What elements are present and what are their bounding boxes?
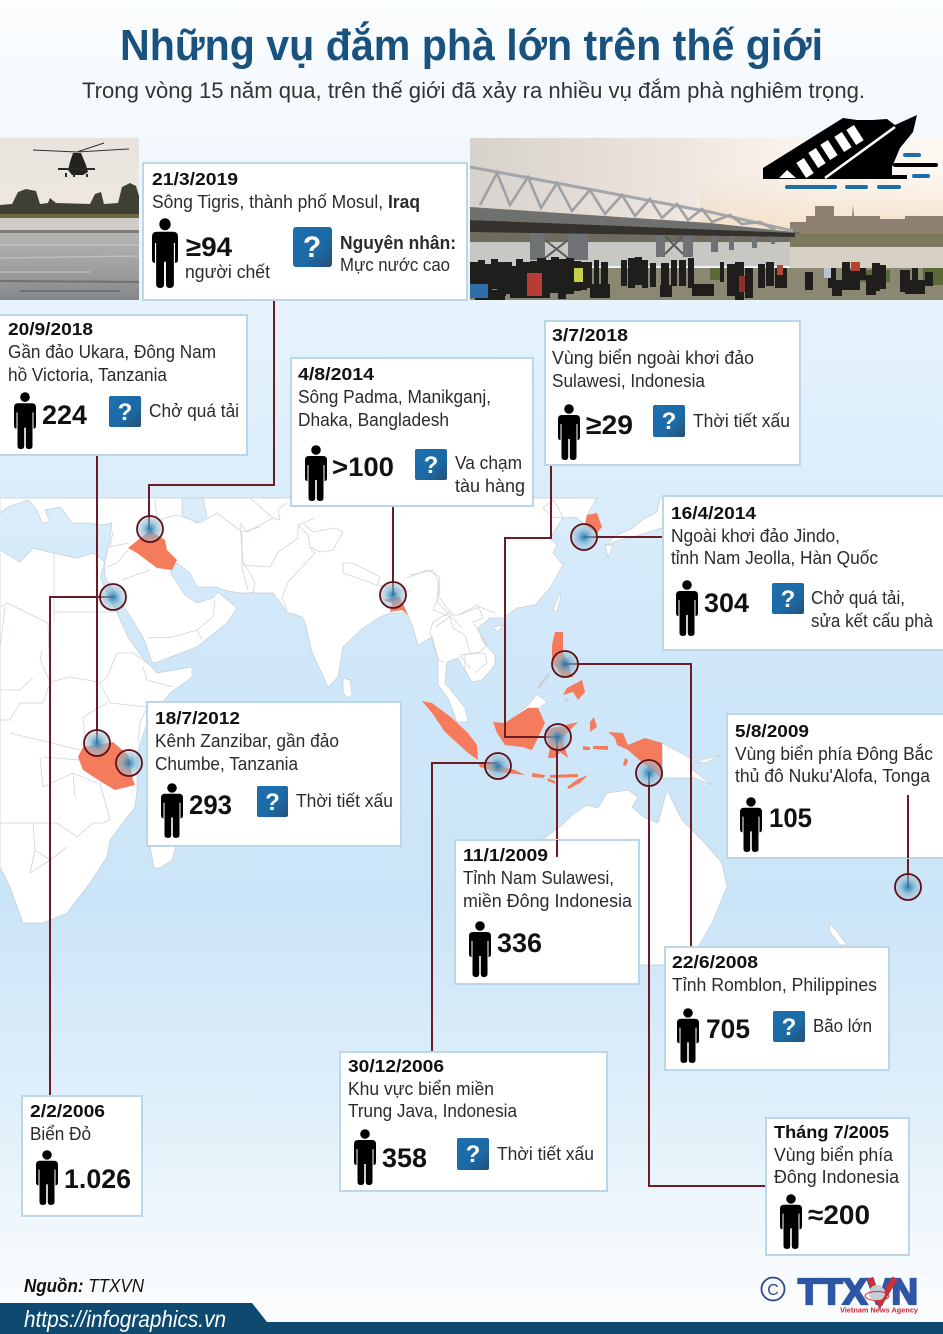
panel: 21/3/2019 Iraq: Mực nước cao	[340, 255, 450, 275]
panel: 20/9/2018 Tanzania: 20/9/2018	[8, 319, 93, 339]
photo: bridge at Mosul with crowd	[470, 138, 943, 300]
panel: 2/2/2006 Red Sea	[22, 1096, 142, 1216]
world map	[0, 498, 847, 965]
panel: 30/12/2006 Java: 358	[382, 1143, 427, 1173]
panel: 3/7/2018 Indonesia: Vùng biển ngoài khơi đảo	[552, 348, 754, 368]
panel: 18/7/2012 Zanzibar: Kênh Zanzibar, gần đảo	[155, 731, 339, 751]
icon: sinking ferry	[763, 115, 938, 189]
panel: 3/7/2018 Indonesia: Sulawesi, Indonesia	[552, 371, 706, 391]
panel: July 2005 Eastern Indonesia: Vùng biển phía	[774, 1145, 894, 1165]
panel: 18/7/2012 Zanzibar: 18/7/2012	[155, 708, 240, 728]
panel: 3/7/2018 Indonesia: ?	[662, 408, 676, 435]
panel: 20/9/2018 Tanzania: Gần đảo Ukara, Đông Nam	[8, 342, 216, 362]
panel: 11/1/2009 Sulawesi: Tỉnh Nam Sulawesi,	[463, 868, 614, 888]
panel: 11/1/2009 Sulawesi	[455, 840, 639, 984]
highlighted countries	[78, 513, 662, 790]
panel: 11/1/2009 Sulawesi: 11/1/2009	[463, 845, 548, 865]
panel: 18/7/2012 Zanzibar: ?	[265, 789, 280, 816]
panel: 4/8/2014 Bangladesh: tàu hàng	[455, 476, 525, 496]
panel: July 2005 Eastern Indonesia	[766, 1118, 909, 1255]
panel: 16/4/2014 South Korea	[663, 496, 943, 650]
panel: 2/2/2006 Red Sea: 2/2/2006	[30, 1101, 105, 1121]
panel: 22/6/2008 Philippines: Bão lớn	[813, 1016, 872, 1036]
panel: 20/9/2018 Tanzania: Chở quá tải	[149, 401, 239, 421]
panel: 18/7/2012 Zanzibar: 293	[189, 790, 232, 820]
panel: 18/7/2012 Zanzibar: Chumbe, Tanzania	[155, 754, 299, 774]
panel: 22/6/2008 Philippines: 705	[706, 1014, 750, 1044]
panel: 22/6/2008 Philippines: ?	[782, 1014, 796, 1041]
panel: 20/9/2018 Tanzania	[0, 315, 247, 455]
panel: 3/7/2018 Indonesia: 3/7/2018	[552, 325, 628, 345]
panel: 2/2/2006 Red Sea: Biển Đỏ	[30, 1124, 91, 1144]
panel: 3/7/2018 Indonesia: ≥29	[586, 410, 633, 440]
panel: 5/8/2009 Tonga: Vùng biển phía Đông Bắc	[735, 743, 933, 764]
panel: 30/12/2006 Java: Khu vực biển miền	[348, 1079, 494, 1099]
panel: 3/7/2018 Indonesia	[545, 321, 800, 465]
panel: 30/12/2006 Java: Thời tiết xấu	[497, 1144, 594, 1164]
panel: 21/3/2019 Iraq: Sông Tigris, thành phố Mosul, Iraq	[152, 192, 420, 212]
country borders	[0, 498, 495, 873]
location markers	[84, 516, 921, 900]
panel: 4/8/2014 Bangladesh: Va chạm	[455, 453, 522, 473]
panel: 20/9/2018 Tanzania: hồ Victoria, Tanzania	[8, 365, 168, 385]
footer bar with website: https://infographics.vn	[24, 1306, 226, 1332]
leader lines	[50, 300, 908, 1186]
panel: July 2005 Eastern Indonesia: ≈200	[808, 1200, 870, 1230]
title: Những vụ đắm phà lớn trên thế giới	[120, 20, 823, 70]
logo: TTXVN: TTXVN	[798, 1271, 918, 1312]
logo: TTXVN: Vietnam News Agency	[840, 1306, 919, 1314]
panel: 11/1/2009 Sulawesi: miền Đông Indonesia	[463, 891, 633, 911]
panel: 4/8/2014 Bangladesh: Sông Padma, Manikganj,	[298, 387, 491, 407]
panel: 20/9/2018 Tanzania: 224	[42, 400, 87, 430]
panel: 3/7/2018 Indonesia: Thời tiết xấu	[693, 411, 790, 431]
panel: 21/3/2019 Iraq: người chết	[185, 262, 270, 282]
panel: 4/8/2014 Bangladesh: >100	[332, 452, 394, 482]
panel: 18/7/2012 Zanzibar: Thời tiết xấu	[296, 791, 393, 811]
panel: 5/8/2009 Tonga: 105	[769, 803, 812, 833]
panel: 16/4/2014 South Korea: 304	[704, 588, 749, 618]
panel: July 2005 Eastern Indonesia: Tháng 7/2005	[774, 1122, 889, 1142]
panel: 5/8/2009 Tonga	[727, 714, 943, 858]
panel: 30/12/2006 Java: 30/12/2006	[348, 1056, 444, 1076]
logo: TTXVN: C	[767, 1282, 779, 1299]
panel: 22/6/2008 Philippines: Tỉnh Romblon, Philippines	[672, 975, 877, 995]
panel: 22/6/2008 Philippines: 22/6/2008	[672, 952, 758, 972]
panel: 21/3/2019 Iraq	[143, 163, 467, 300]
panel: 21/3/2019 Iraq: ≥94	[186, 232, 232, 262]
panel: 16/4/2014 South Korea: tỉnh Nam Jeolla, Hàn Quốc	[671, 548, 878, 568]
panel: 2/2/2006 Red Sea: 1.026	[64, 1164, 131, 1194]
panel: 16/4/2014 South Korea: Chở quá tải,	[811, 588, 905, 608]
panel: 30/12/2006 Java: Trung Java, Indonesia	[348, 1101, 518, 1121]
panel: 22/6/2008 Philippines	[665, 947, 889, 1070]
panel: 16/4/2014 South Korea: sửa kết cấu phà	[811, 611, 934, 631]
panel: 16/4/2014 South Korea: Ngoài khơi đảo Jindo,	[671, 526, 840, 546]
panel: 5/8/2009 Tonga: 5/8/2009	[735, 721, 809, 741]
source: Nguồn: TTXVN	[24, 1276, 145, 1296]
panel: 4/8/2014 Bangladesh: Dhaka, Bangladesh	[298, 410, 449, 430]
panel: July 2005 Eastern Indonesia: Đông Indonesia	[774, 1167, 900, 1187]
panel: 4/8/2014 Bangladesh	[291, 358, 533, 506]
panel: 11/1/2009 Sulawesi: 336	[497, 928, 542, 958]
panel: 5/8/2009 Tonga: thủ đô Nuku'Alofa, Tonga	[735, 766, 931, 786]
panel: 4/8/2014 Bangladesh: 4/8/2014	[298, 364, 374, 384]
photo: helicopter over river	[0, 138, 139, 300]
panel: 4/8/2014 Bangladesh: ?	[424, 452, 438, 479]
panel: 16/4/2014 South Korea: 16/4/2014	[671, 503, 756, 523]
panel: 21/3/2019 Iraq: Nguyên nhân:	[340, 233, 456, 253]
panel: 16/4/2014 South Korea: ?	[781, 586, 795, 613]
panel: 20/9/2018 Tanzania: ?	[118, 399, 132, 426]
panel: 30/12/2006 Java	[340, 1052, 607, 1191]
panel: 30/12/2006 Java: ?	[466, 1141, 480, 1168]
panel: 21/3/2019 Iraq: ?	[303, 231, 321, 264]
panel: 18/7/2012 Zanzibar	[147, 702, 401, 846]
panel: 21/3/2019 Iraq: 21/3/2019	[152, 169, 238, 189]
subtitle: Trong vòng 15 năm qua, trên thế giới đã xảy ra nhiều vụ đắm phà nghiêm trọng.	[82, 78, 865, 103]
footer bar with website	[0, 1303, 943, 1334]
